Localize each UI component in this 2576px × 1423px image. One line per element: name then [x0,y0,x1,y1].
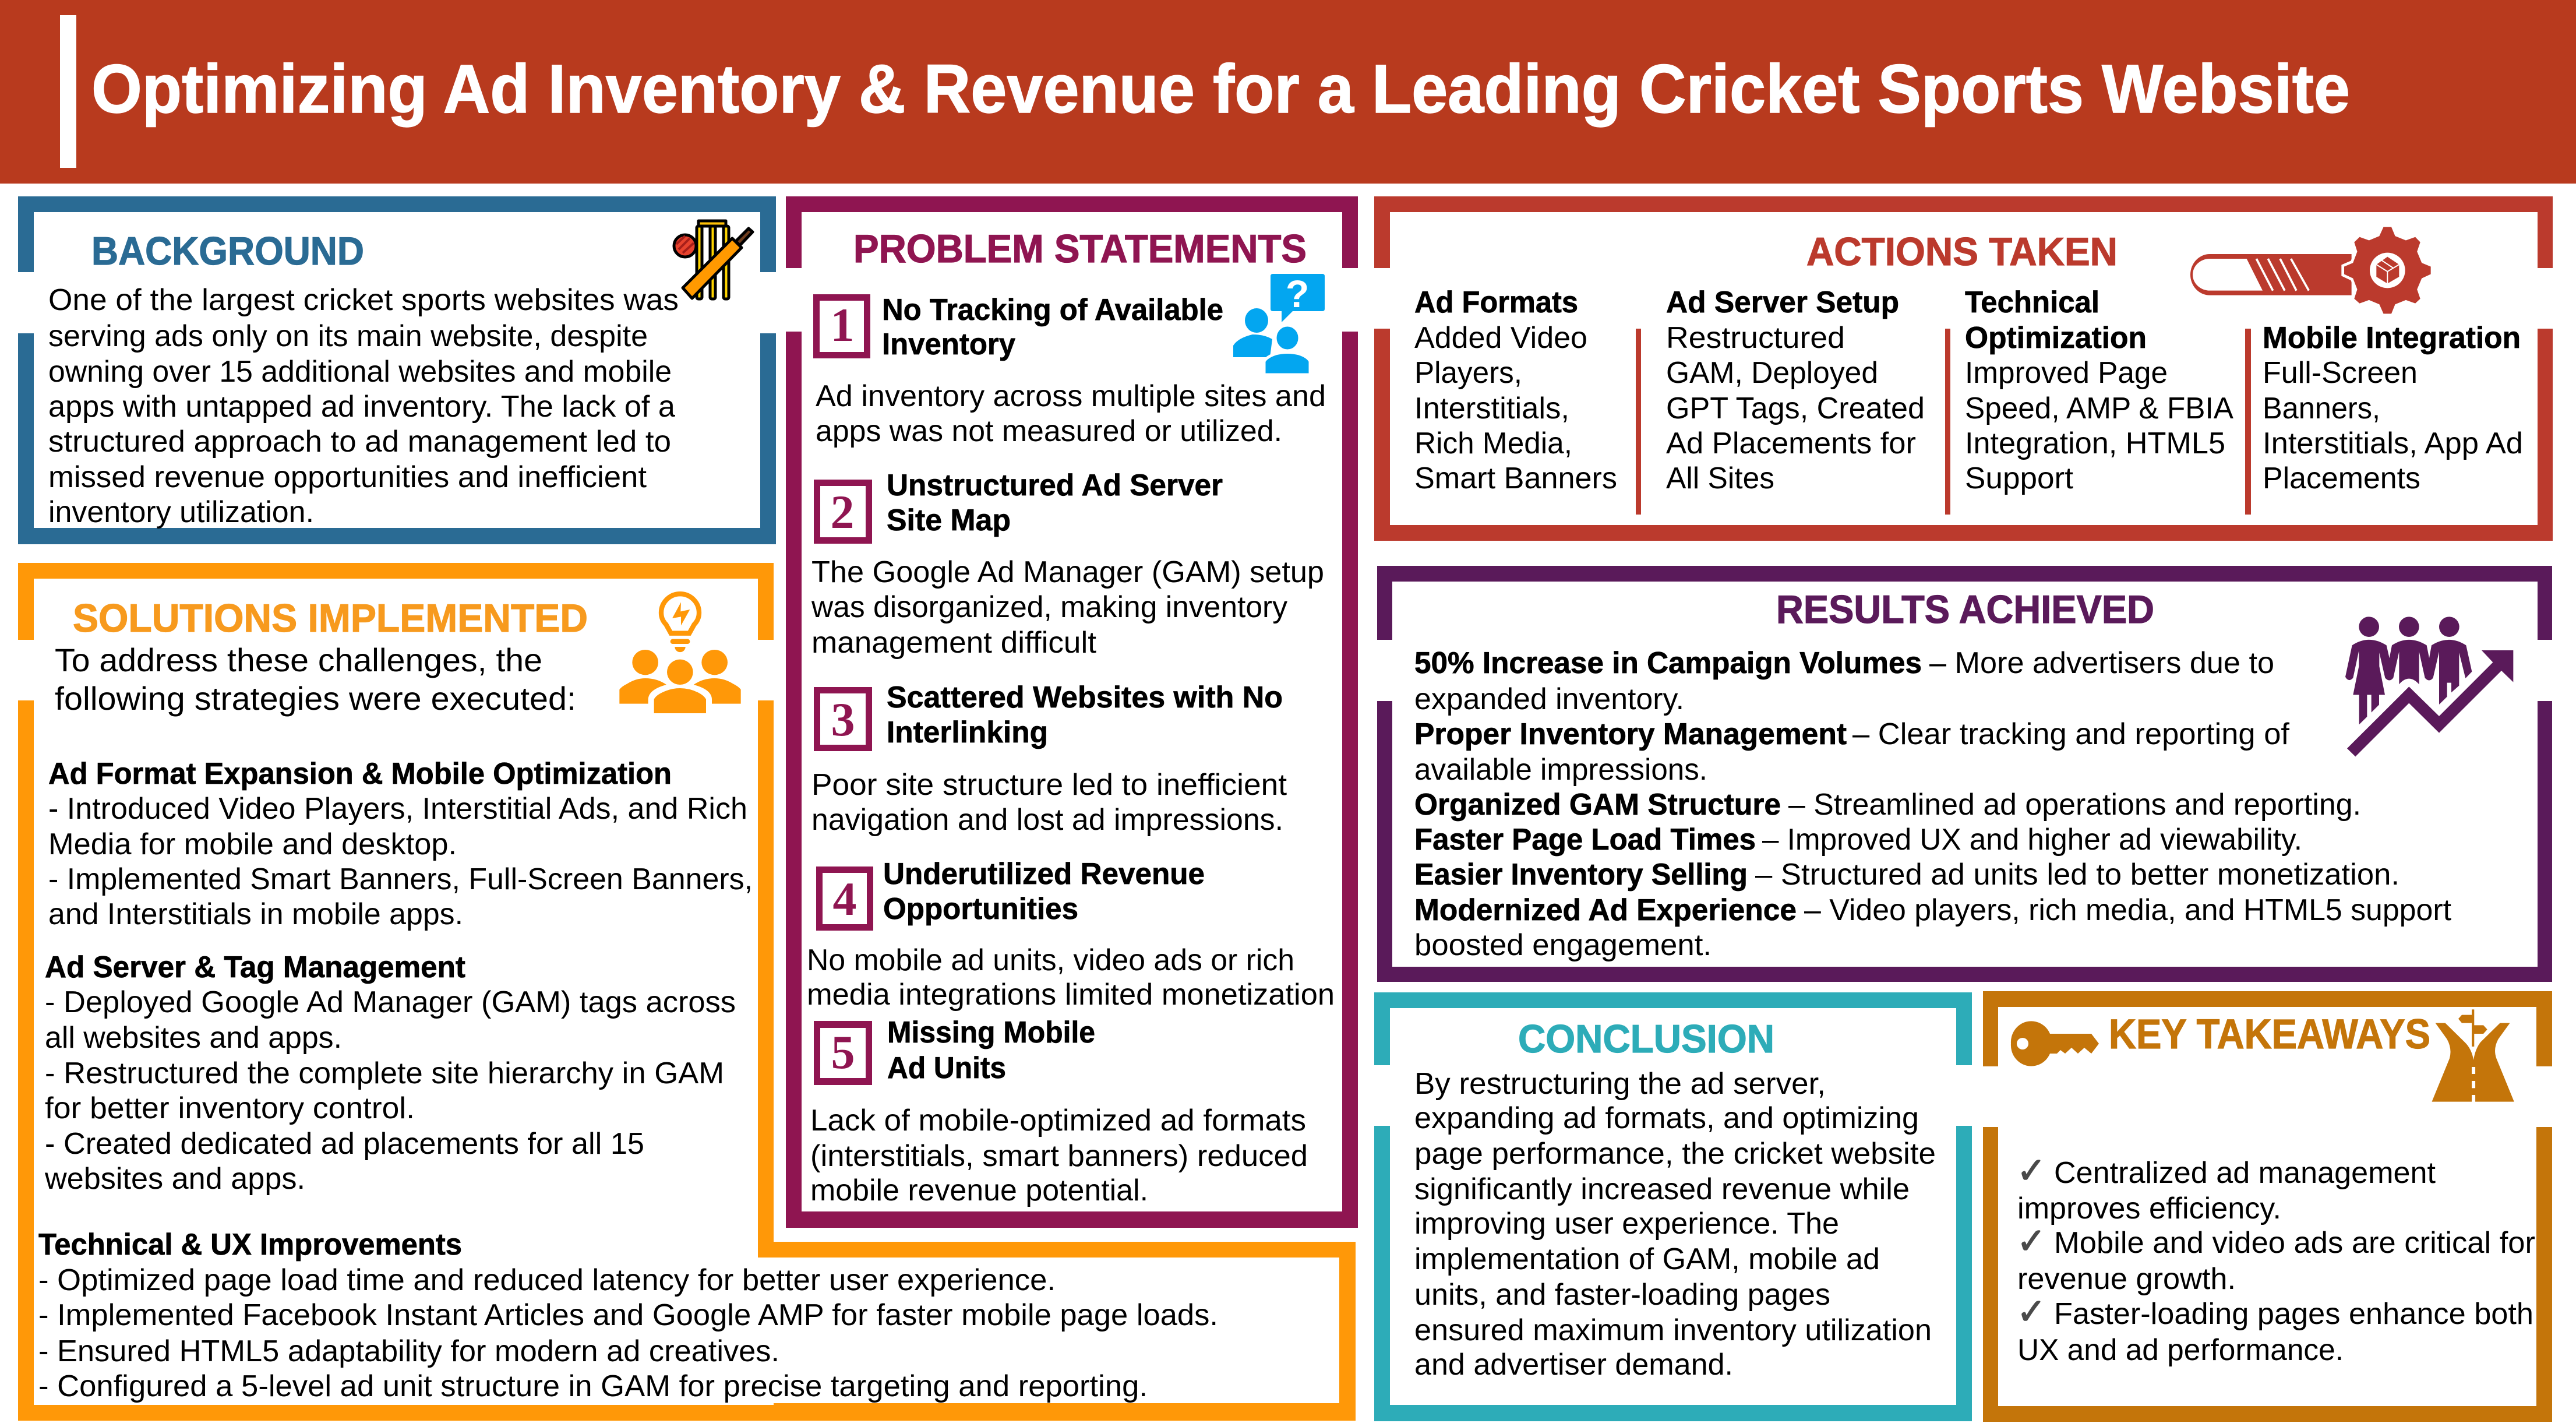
takeaways list: Mobile and video ads are critical for [2054,1226,2535,1260]
column: ad formats: Players, [1414,356,1522,390]
item 4: underutilized revenue: No mobile ad units, video ads or rich [807,943,1294,977]
takeaways list: improves efficiency. [2017,1192,2281,1225]
column: ad server setup [1666,286,1925,495]
item 3: scattered websites: Interlinking [887,716,1048,749]
item 5: missing mobile ad units: (interstitials, smart banners) reduced [810,1139,1308,1173]
heading: conclusion: CONCLUSION [1518,1017,1774,1061]
conclusion text: expanding ad formats, and optimizing [1414,1101,1919,1135]
block: ad format expansion and mobile optimization: - Implemented Smart Banners, Full-Screen Banners, [48,862,753,896]
conclusion text: By restructuring the ad server, [1414,1067,1826,1101]
conclusion text: and advertiser demand. [1414,1348,1733,1382]
icon: people over rising arrow [2345,617,2513,756]
item 4: underutilized revenue: 4 [833,872,856,925]
block: technical and ux improvements: - Ensured HTML5 adaptability for modern ad creatives. [38,1334,779,1368]
icon: forked road with signpost [2432,1009,2514,1102]
background text: inventory utilization. [48,495,314,529]
results list: – Clear tracking and reporting of [1852,717,2290,751]
results list: Organized GAM Structure [1414,788,1781,822]
takeaways list: revenue growth. [2017,1262,2236,1296]
block: ad format expansion and mobile optimization: Ad Format Expansion & Mobile Optimization [48,757,672,791]
intro text: To address these challenges, the [55,642,542,678]
column: technical optimization: Speed, AMP & FBIA [1965,392,2233,425]
results list: Modernized Ad Experience [1414,893,1797,927]
block: technical and ux improvements [38,1228,1218,1403]
conclusion text: units, and faster-loading pages [1414,1278,1830,1312]
block: ad format expansion and mobile optimization: Media for mobile and desktop. [48,827,457,861]
panel: background [17,196,777,544]
column: ad server setup: GPT Tags, Created [1666,392,1925,425]
column: ad formats [1414,286,1617,495]
heading: solutions implemented: SOLUTIONS IMPLEMENTED [73,596,588,640]
block: ad server and tag management: all websites and apps. [45,1021,342,1055]
panel: conclusion [1374,992,1972,1421]
background text: missed revenue opportunities and inefficient [48,460,647,494]
intro text [55,642,576,717]
item 3: scattered websites: Scattered Websites with No [887,681,1283,714]
panel: solutions implemented [17,563,1356,1421]
column: ad formats: Interstitials, [1414,392,1569,425]
item 2: unstructured ad server: was disorganized, making inventory [811,590,1287,624]
block: ad format expansion and mobile optimization: - Introduced Video Players, Interstitial Ads, and Rich [48,792,747,826]
takeaways list [2017,1149,2535,1367]
background text [48,283,679,529]
block: ad server and tag management: - Deployed Google Ad Manager (GAM) tags across [45,985,736,1019]
icon: people with question bubble [1233,272,1325,375]
panel: results achieved [1377,566,2553,982]
item 1: no tracking: Ad inventory across multiple sites and [816,379,1326,413]
takeaways list: ✓ [2017,1290,2046,1333]
results list: boosted engagement. [1414,928,1712,962]
item 2: unstructured ad server: management difficult [811,626,1097,660]
column: mobile integration: Placements [2263,462,2420,495]
item 3: scattered websites: 3 [831,693,855,746]
block: technical and ux improvements: - Configured a 5-level ad unit structure in GAM for precise targeting and reporting. [38,1369,1148,1403]
takeaways list: ✓ [2017,1220,2046,1262]
item 4: underutilized revenue [807,857,1335,1012]
results list: – Structured ad units led to better monetization. [1755,858,2399,892]
block: ad format expansion and mobile optimization [48,757,753,931]
header banner [0,0,2576,184]
takeaways list: Centralized ad management [2054,1156,2436,1190]
item 2: unstructured ad server [811,469,1324,660]
item 5: missing mobile ad units: Missing Mobile [887,1016,1095,1049]
panel: problem statements [785,196,1358,1228]
takeaways list: UX and ad performance. [2017,1333,2344,1367]
conclusion text [1414,1067,1936,1382]
background text: apps with untapped ad inventory. The lack of a [48,390,675,424]
block: ad server and tag management: - Restructured the complete site hierarchy in GAM [45,1056,724,1090]
item 5: missing mobile ad units: Lack of mobile-optimized ad formats [810,1104,1306,1137]
column: ad server setup: Ad Server Setup [1666,286,1899,319]
background text: serving ads only on its main website, despite [48,319,648,353]
column: technical optimization [1965,286,2233,495]
column: mobile integration: Mobile Integration [2263,321,2521,355]
background text: structured approach to ad management led to [48,425,671,459]
results list: Faster Page Load Times [1414,823,1756,857]
column: ad formats: Ad Formats [1414,286,1578,319]
background text: owning over 15 additional websites and mobile [48,355,672,389]
item 5: missing mobile ad units [810,1016,1308,1207]
heading: results achieved: RESULTS ACHIEVED [1776,587,2154,632]
item 2: unstructured ad server: The Google Ad Manager (GAM) setup [811,555,1324,589]
column: technical optimization: Integration, HTML5 [1965,427,2225,460]
item 1: no tracking: apps was not measured or utilized. [816,414,1282,448]
column: ad server setup: Restructured [1666,321,1845,355]
block: ad format expansion and mobile optimization: and Interstitials in mobile apps. [48,897,463,931]
block: technical and ux improvements: - Implemented Facebook Instant Articles and Google AMP for faster mobile page loads. [38,1298,1218,1332]
background text: One of the largest cricket sports websites was [48,283,679,317]
takeaways list: ✓ [2017,1149,2046,1192]
item 5: missing mobile ad units: Ad Units [887,1051,1006,1085]
results list [1414,646,2452,962]
intro text: following strategies were executed: [55,680,576,717]
results list: – Streamlined ad operations and reporting. [1788,788,2361,822]
conclusion text: page performance, the cricket website [1414,1137,1936,1171]
block: ad server and tag management: - Created dedicated ad placements for all 15 [45,1127,644,1161]
column: technical optimization: Improved Page [1965,356,2168,390]
block: technical and ux improvements: Technical & UX Improvements [38,1228,462,1262]
column: technical optimization: Support [1965,462,2074,495]
column: mobile integration: Interstitials, App Ad [2263,427,2523,460]
item 2: unstructured ad server: Site Map [887,503,1011,537]
results list: available impressions. [1414,753,1707,787]
conclusion text: improving user experience. The [1414,1207,1839,1241]
item 4: underutilized revenue: Underutilized Revenue [883,857,1205,891]
column: ad formats: Added Video [1414,321,1587,355]
icon: lightbulb over team [619,594,741,713]
column: ad server setup: GAM, Deployed [1666,356,1878,390]
results list: Easier Inventory Selling [1414,858,1748,892]
results list: 50% Increase in Campaign Volumes [1414,646,1922,680]
takeaways list: Faster-loading pages enhance both [2054,1297,2533,1331]
icon: cricket bat, ball and stumps [674,221,753,299]
item 1: no tracking: No Tracking of Available [882,293,1223,327]
item 3: scattered websites: navigation and lost ad impressions. [811,803,1283,837]
icon: key [2011,1021,2099,1066]
block: ad server and tag management [44,950,736,1196]
heading: background: BACKGROUND [91,229,364,273]
block: ad server and tag management: websites and apps. [44,1162,305,1196]
heading: key takeaways: KEY TAKEAWAYS [2109,1012,2430,1058]
conclusion text: ensured maximum inventory utilization [1414,1313,1932,1347]
results list: – More advertisers due to [1929,646,2274,680]
results list: Proper Inventory Management [1414,717,1847,751]
heading: actions taken: ACTIONS TAKEN [1806,230,2118,274]
column: mobile integration: Full-Screen [2263,356,2418,390]
item 2: unstructured ad server: 2 [831,485,854,538]
column: mobile integration: Banners, [2263,392,2380,425]
column: ad formats: Rich Media, [1414,427,1572,460]
column: technical optimization: Optimization [1965,321,2147,355]
conclusion text: implementation of GAM, mobile ad [1414,1242,1880,1276]
block: ad server and tag management: for better inventory control. [45,1091,415,1125]
heading: problem statements: PROBLEM STATEMENTS [853,227,1307,271]
block: technical and ux improvements: - Optimized page load time and reduced latency for better user experience. [38,1263,1056,1297]
column: mobile integration [2263,321,2523,495]
results list: – Video players, rich media, and HTML5 support [1804,893,2452,927]
results list: – Improved UX and higher ad viewability. [1762,823,2302,857]
column: ad server setup: Ad Placements for [1666,427,1916,460]
panel: key takeaways [1982,991,2553,1422]
results list: expanded inventory. [1414,682,1684,716]
item 4: underutilized revenue: media integrations limited monetization [807,978,1335,1012]
item 1: no tracking [813,293,1326,448]
block: ad server and tag management: Ad Server & Tag Management [45,950,465,984]
column: ad server setup: All Sites [1666,462,1774,495]
item 1: no tracking: 1 [831,298,854,351]
conclusion text: significantly increased revenue while [1414,1172,1910,1206]
item 5: missing mobile ad units: mobile revenue potential. [810,1174,1148,1207]
item 2: unstructured ad server: Unstructured Ad Server [887,469,1223,502]
item 3: scattered websites: Poor site structure led to inefficient [811,768,1287,802]
title: Optimizing Ad Inventory & Revenue for a Leading Cricket Sports Website [91,51,2350,128]
icon: people with question bubble: ? [1286,272,1309,315]
panel: actions taken [1374,196,2553,541]
column: technical optimization: Technical [1965,286,2099,319]
item 4: underutilized revenue: Opportunities [883,892,1078,926]
item 5: missing mobile ad units: 5 [831,1026,855,1079]
item 3: scattered websites [811,681,1287,837]
item 1: no tracking: Inventory [882,327,1015,361]
icon: gear slider [2190,226,2432,315]
column: ad formats: Smart Banners [1414,462,1617,495]
